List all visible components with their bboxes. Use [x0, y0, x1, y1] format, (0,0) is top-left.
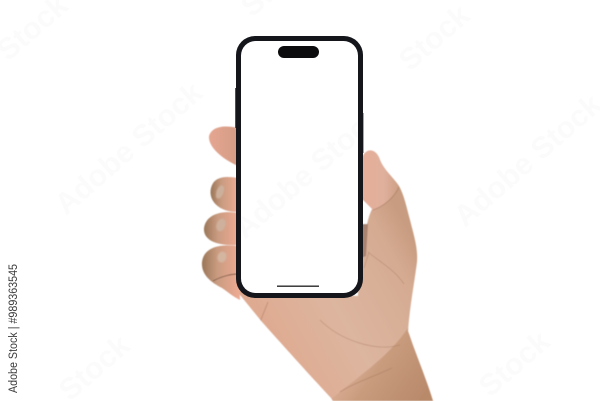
palm and wrist silhouette: [236, 151, 433, 401]
wrist shading: [332, 328, 434, 401]
watermark: repeated stock text: Adobe Stock: [49, 76, 209, 221]
watermark on screen: Adobe Stock: [228, 100, 388, 245]
phone: [235, 36, 364, 298]
phone body: [236, 36, 363, 298]
hand: palm and wrist: [202, 127, 440, 401]
home indicator: [277, 286, 319, 287]
fingertips behind the phone: [361, 224, 368, 258]
finger crease: [213, 274, 238, 281]
thumb: [361, 150, 399, 210]
side buttons: [235, 88, 236, 128]
little finger: [202, 245, 240, 300]
gap between thumb and phone: [361, 198, 372, 224]
watermark: repeated stock text: Stock: [473, 325, 556, 401]
illustration: hand holding smartphone: [8, 36, 434, 401]
stock credit label: Adobe Stock | #989363545: [8, 264, 20, 393]
fingernails: [214, 184, 226, 200]
dynamic island: [278, 46, 319, 58]
hand creases: [260, 187, 404, 392]
ring finger: [204, 212, 238, 245]
watermark: repeated stock text: Stock: [393, 0, 476, 77]
index finger: [209, 127, 238, 166]
middle finger: [210, 177, 238, 212]
phone screen: [241, 41, 358, 293]
